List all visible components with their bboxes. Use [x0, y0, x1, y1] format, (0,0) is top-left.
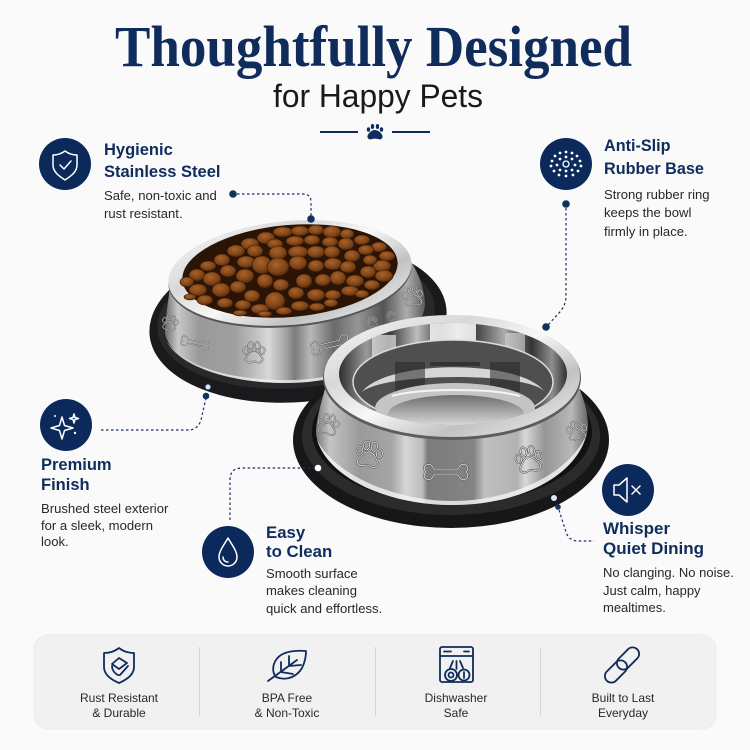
body text: look. [41, 534, 69, 549]
embossed paw and bone marks: front bowl [316, 412, 588, 480]
body text: Brushed steel exterior [41, 501, 168, 516]
callout: hygienic stainless steel [39, 138, 220, 221]
heading: Stainless Steel [104, 163, 220, 181]
body text: Safe, non-toxic and [104, 188, 217, 203]
body text: Smooth surface [266, 566, 358, 581]
icon: leaf [268, 651, 306, 681]
icon: paw divider [320, 124, 430, 139]
heading: Finish [41, 476, 90, 494]
icon: rubber dots [540, 138, 592, 190]
heading: Anti-Slip [604, 137, 671, 155]
label: Built to Last [592, 691, 654, 705]
body text: rust resistant. [104, 206, 183, 221]
title: Thoughtfully Designed [115, 14, 632, 79]
label: Safe [444, 706, 469, 720]
body text: Just calm, happy [603, 583, 701, 598]
label: BPA Free [262, 691, 312, 705]
label: & Durable [92, 706, 146, 720]
body text: mealtimes. [603, 600, 666, 615]
body text: Strong rubber ring [604, 187, 710, 202]
back bowl with food [143, 211, 453, 415]
label: Rust Resistant [80, 691, 158, 705]
rubber base: front bowl [293, 352, 609, 528]
heading: to Clean [266, 542, 332, 561]
benefit: BPA free [255, 651, 319, 720]
steel body: front bowl [316, 385, 588, 505]
body text: keeps the bowl [604, 205, 691, 220]
icon: shield [104, 648, 134, 683]
connector: hygienic stainless steel [229, 190, 315, 223]
label: Everyday [598, 706, 648, 720]
connector: anti-slip rubber base [542, 200, 570, 331]
icon: sparkles [40, 399, 92, 451]
body text: No clanging. No noise. [603, 565, 734, 580]
steel body: back bowl [165, 258, 425, 383]
body text: makes cleaning [266, 583, 357, 598]
connector: whisper quiet dining [551, 495, 594, 541]
kibble [178, 216, 402, 326]
rubber base: back bowl [143, 229, 453, 415]
label: Dishwasher [425, 691, 487, 705]
connector: easy to clean [230, 465, 321, 520]
icon: water drop [202, 526, 254, 578]
heading: Easy [266, 523, 305, 542]
front empty bowl [293, 315, 609, 528]
icon: chain link [602, 645, 642, 685]
benefit: dishwasher safe [425, 647, 487, 720]
callout: easy to clean [202, 523, 382, 616]
heading: Quiet Dining [603, 539, 704, 558]
benefit: rust resistant [80, 648, 159, 720]
benefit: built to last [592, 645, 655, 720]
callout: whisper quiet dining [602, 464, 734, 615]
panel: benefits strip [34, 635, 716, 729]
body text: quick and effortless. [266, 601, 382, 616]
connector: premium finish [101, 384, 211, 430]
heading: Rubber Base [604, 160, 704, 178]
subtitle: for Happy Pets [273, 78, 483, 114]
body text: for a sleek, modern [41, 518, 153, 533]
heading: Whisper [603, 519, 670, 538]
callout: anti-slip rubber base [540, 137, 710, 239]
heading: Hygienic [104, 141, 173, 159]
callout: premium finish [40, 399, 169, 549]
icon: dishwasher [440, 647, 473, 682]
body text: firmly in place. [604, 224, 688, 239]
interior: front bowl [339, 323, 568, 433]
label: & Non-Toxic [255, 706, 319, 720]
heading: Premium [41, 456, 112, 474]
rim: back bowl [164, 213, 416, 337]
icon: shield check [39, 138, 91, 190]
embossed paw and bone marks: back bowl [161, 285, 424, 363]
icon: muted speaker [602, 464, 654, 516]
rim: front bowl [323, 316, 581, 440]
